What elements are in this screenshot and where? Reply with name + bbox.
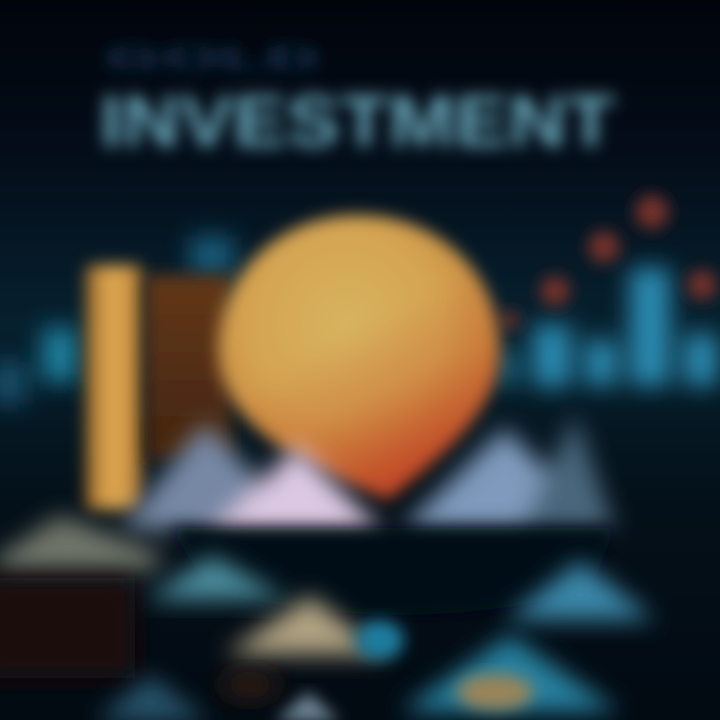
title kicker: GOLD (105, 42, 320, 75)
bar chart: right side (498, 268, 718, 387)
bottom mound left (95, 675, 210, 720)
blue mound right (505, 560, 655, 620)
coin red shading (218, 215, 500, 500)
title (100, 42, 615, 162)
mountains (120, 415, 615, 535)
bottom small mound (275, 692, 340, 720)
tan accent (457, 674, 533, 710)
left mound (0, 515, 165, 572)
title main: INVESTMENT (100, 82, 615, 162)
teal mound (145, 555, 290, 600)
gold bar (86, 265, 142, 510)
gold coin (218, 215, 500, 500)
dark brown bowl left (0, 578, 135, 678)
bar chart: left side (0, 236, 234, 404)
bottom mound right (400, 635, 620, 712)
brown bar (146, 275, 231, 460)
tan mound (225, 595, 385, 655)
blue accent (356, 620, 404, 660)
dark bowl (170, 528, 615, 615)
trend line dots (501, 195, 717, 329)
coin body (218, 215, 500, 500)
brown accent (220, 671, 280, 699)
